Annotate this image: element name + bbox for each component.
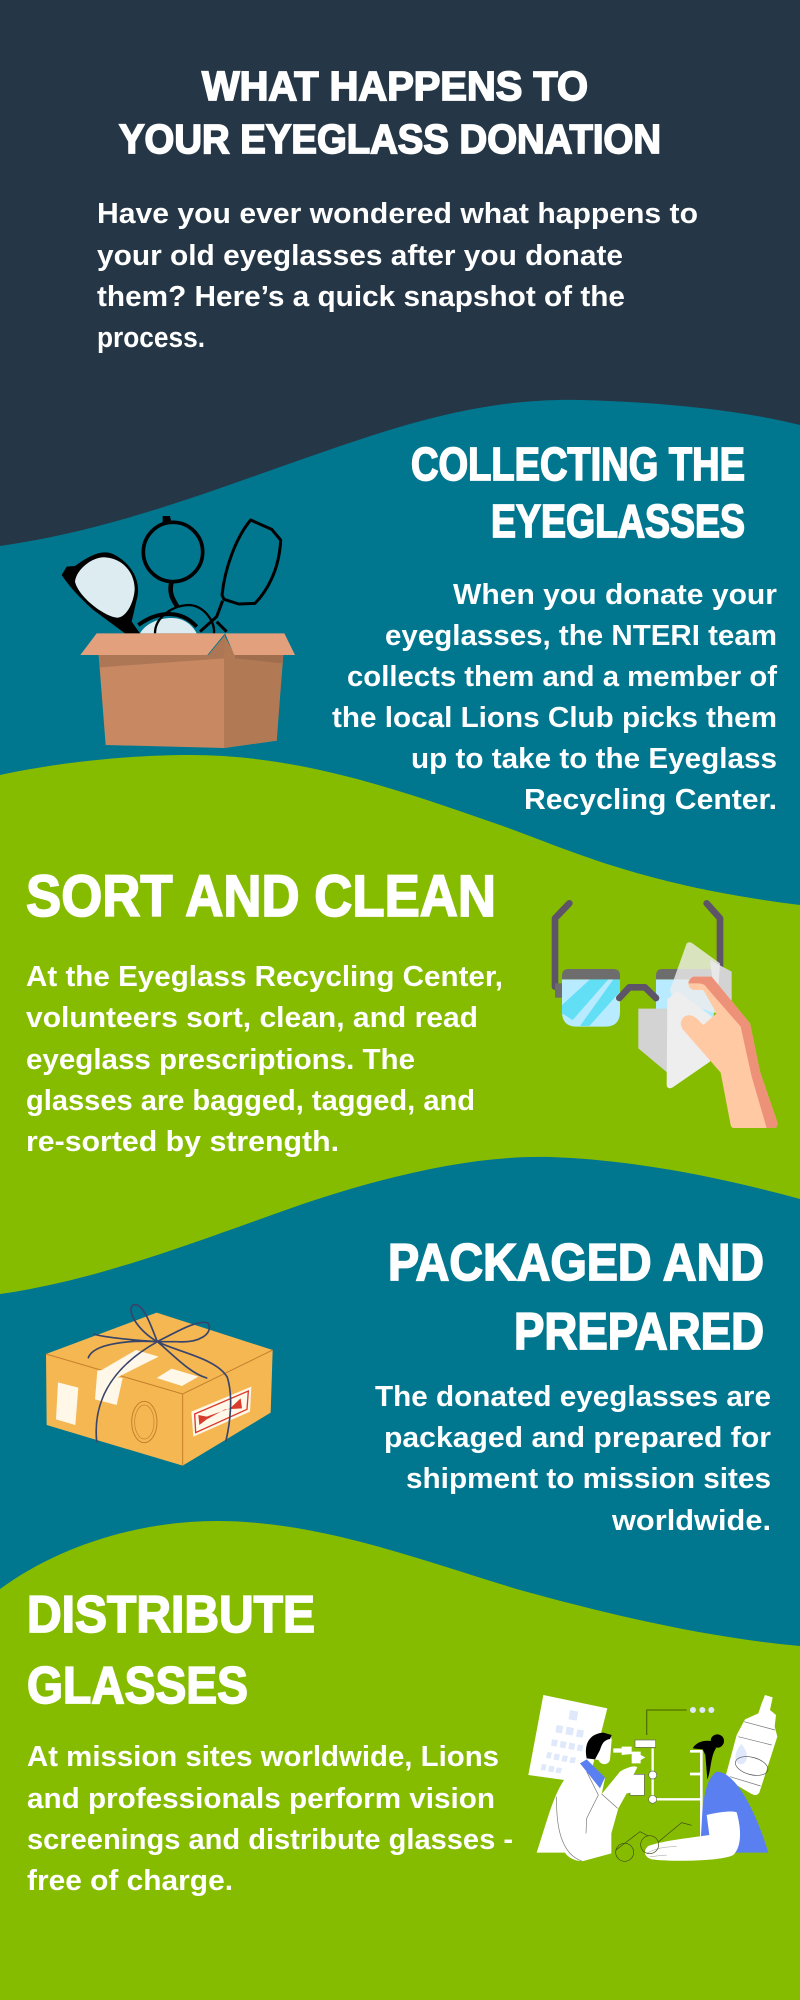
text: collecting description: When you donate your xyxy=(453,579,777,611)
intro text: Have you ever wondered what happens to xyxy=(97,198,698,230)
text: distribute description: At mission sites worldwide, Lions xyxy=(27,1741,499,1773)
text: distribute description xyxy=(27,1741,513,1897)
text: packaged description: shipment to mission sites xyxy=(406,1463,771,1495)
icon: wrapped parcel xyxy=(46,1305,273,1466)
heading: collecting the eyeglasses: EYEGLASSES xyxy=(491,495,745,547)
background wave: teal section three xyxy=(0,1157,800,2000)
heading: distribute glasses: DISTRIBUTE xyxy=(27,1586,315,1644)
text: packaged description: worldwide. xyxy=(611,1505,771,1537)
intro text: your old eyeglasses after you donate xyxy=(97,240,623,272)
text: collecting description xyxy=(332,579,777,816)
icon: cardboard box of eyeglasses xyxy=(62,516,295,748)
text: distribute description: and professionals perform vision xyxy=(27,1783,495,1815)
text: collecting description: collects them and a member of xyxy=(347,661,777,693)
text: sort and clean description: At the Eyeglass Recycling Center, xyxy=(26,961,503,993)
text: distribute description: free of charge. xyxy=(27,1865,233,1897)
intro text xyxy=(97,198,698,354)
title xyxy=(119,63,661,162)
title: YOUR EYEGLASS DONATION xyxy=(119,116,661,162)
intro text: them? Here’s a quick snapshot of the xyxy=(97,281,625,313)
text: packaged description: packaged and prepared for xyxy=(384,1422,771,1454)
text: distribute description: screenings and distribute glasses - xyxy=(27,1824,513,1856)
background wave: green section two xyxy=(0,755,800,2000)
intro text: process. xyxy=(97,322,205,354)
text: sort and clean description: re-sorted by strength. xyxy=(26,1126,339,1158)
heading: sort and clean: SORT AND CLEAN xyxy=(26,864,496,929)
text: sort and clean description xyxy=(26,961,503,1158)
title: WHAT HAPPENS TO xyxy=(202,63,588,109)
icon: hand cleaning glasses xyxy=(555,903,778,1128)
icon: eye exam illustration xyxy=(528,1695,777,1861)
text: sort and clean description: glasses are bagged, tagged, and xyxy=(26,1085,475,1117)
text: collecting description: up to take to the Eyeglass xyxy=(411,743,777,775)
heading: packaged and prepared: PREPARED xyxy=(514,1303,764,1361)
heading: packaged and prepared: PACKAGED AND xyxy=(388,1234,764,1292)
text: collecting description: Recycling Center. xyxy=(524,784,777,816)
text: collecting description: eyeglasses, the NTERI team xyxy=(385,620,777,652)
text: packaged description xyxy=(375,1381,771,1537)
text: packaged description: The donated eyeglasses are xyxy=(375,1381,771,1413)
text: sort and clean description: eyeglass prescriptions. The xyxy=(26,1044,415,1076)
heading: distribute glasses: GLASSES xyxy=(27,1657,248,1715)
heading: packaged and prepared xyxy=(388,1234,764,1361)
heading: collecting the eyeglasses xyxy=(411,438,745,547)
text: collecting description: the local Lions Club picks them xyxy=(332,702,777,734)
heading: distribute glasses xyxy=(27,1586,315,1715)
background wave: green section four xyxy=(0,1521,800,2000)
text: sort and clean description: volunteers sort, clean, and read xyxy=(26,1002,478,1034)
